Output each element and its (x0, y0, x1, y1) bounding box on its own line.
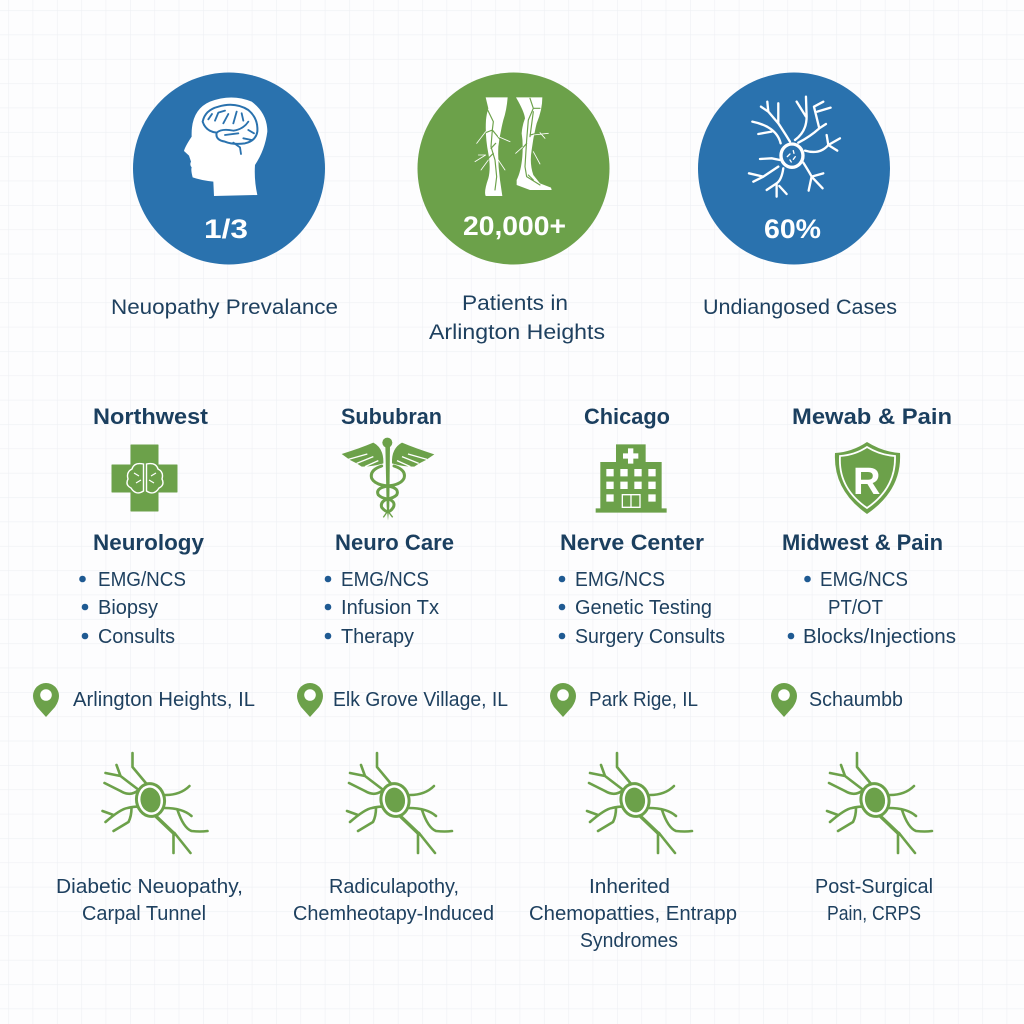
icon: shield with R: R (853, 461, 880, 503)
location (33, 683, 255, 717)
icon: caduceus (342, 438, 434, 521)
heading: Mewab & Pain (792, 404, 952, 429)
services list (788, 569, 956, 648)
stat: patients (418, 72, 610, 344)
value: 60% (764, 214, 821, 244)
heading: Northwest (93, 404, 209, 429)
services list: Therapy (341, 626, 414, 648)
location: Arlington Heights, IL (73, 689, 255, 711)
location (297, 683, 508, 717)
conditions: Carpal Tunnel (82, 903, 206, 925)
location: Schaumbb (809, 689, 903, 711)
conditions: Chemheotapy-Induced (293, 903, 494, 925)
value: 20,000+ (463, 211, 566, 241)
conditions (529, 876, 737, 952)
services list (559, 569, 725, 648)
stat: neuropathy prevalence (111, 72, 338, 319)
icon: hospital building (596, 444, 667, 513)
label: Patients in (462, 292, 568, 315)
subheading: Neuro Care (335, 530, 454, 555)
services list: Surgery Consults (575, 626, 725, 648)
services list: EMG/NCS (820, 569, 908, 591)
icon: neuron (347, 753, 452, 853)
conditions (815, 876, 933, 925)
conditions: Post-Surgical (815, 876, 933, 898)
circle: blue background (698, 72, 890, 264)
label: Arlington Heights (429, 321, 605, 344)
conditions: Syndromes (580, 930, 678, 952)
services list (325, 569, 439, 648)
services list: PT/OT (828, 597, 883, 619)
services list (79, 569, 186, 648)
heading: Chicago (584, 404, 670, 429)
icon: shield with R (835, 442, 900, 514)
conditions (56, 876, 243, 925)
circle: green background (418, 72, 610, 264)
clinic: Chicago Nerve Center (529, 404, 737, 952)
services list: EMG/NCS (98, 569, 186, 591)
conditions: Chemopatties, Entrapp (529, 903, 737, 925)
icon: head with brain (184, 97, 267, 196)
conditions: Radiculapothy, (329, 876, 459, 898)
services list: Biopsy (98, 597, 158, 619)
icon: medical cross with brain (112, 445, 177, 511)
conditions: Inherited (589, 876, 670, 898)
services list: Blocks/Injections (803, 626, 956, 648)
location (550, 683, 698, 717)
services list: Genetic Testing (575, 597, 712, 619)
location (771, 683, 903, 717)
location: Park Rige, IL (589, 689, 698, 711)
icon: legs with nerves (475, 97, 552, 196)
services list: EMG/NCS (575, 569, 665, 591)
location: Elk Grove Village, IL (333, 689, 508, 711)
icon: white neuron (749, 97, 840, 197)
icon: neuron (827, 753, 932, 853)
conditions: Pain, CRPS (827, 903, 921, 925)
circle: blue background (133, 72, 325, 264)
stat: undiagnosed cases (698, 72, 897, 319)
services list: Consults (98, 626, 175, 648)
subheading: Nerve Center (560, 530, 704, 555)
services list: Infusion Tx (341, 597, 439, 619)
clinic: Suburban Neuro Care (293, 404, 508, 925)
subheading: Midwest & Pain (782, 530, 943, 555)
label: Neuopathy Prevalance (111, 296, 338, 319)
clinic: Northwest Neurology (33, 404, 255, 925)
label: Undiangosed Cases (703, 296, 897, 319)
value: 1/3 (204, 214, 248, 244)
icon: neuron (587, 753, 692, 853)
services list: EMG/NCS (341, 569, 429, 591)
icon: neuron (102, 753, 208, 853)
conditions: Diabetic Neuopathy, (56, 876, 243, 898)
label (429, 292, 605, 344)
conditions (293, 876, 494, 925)
heading: Sububran (341, 404, 442, 429)
subheading: Neurology (93, 530, 205, 555)
clinic: Midwest & Pain (771, 404, 956, 925)
